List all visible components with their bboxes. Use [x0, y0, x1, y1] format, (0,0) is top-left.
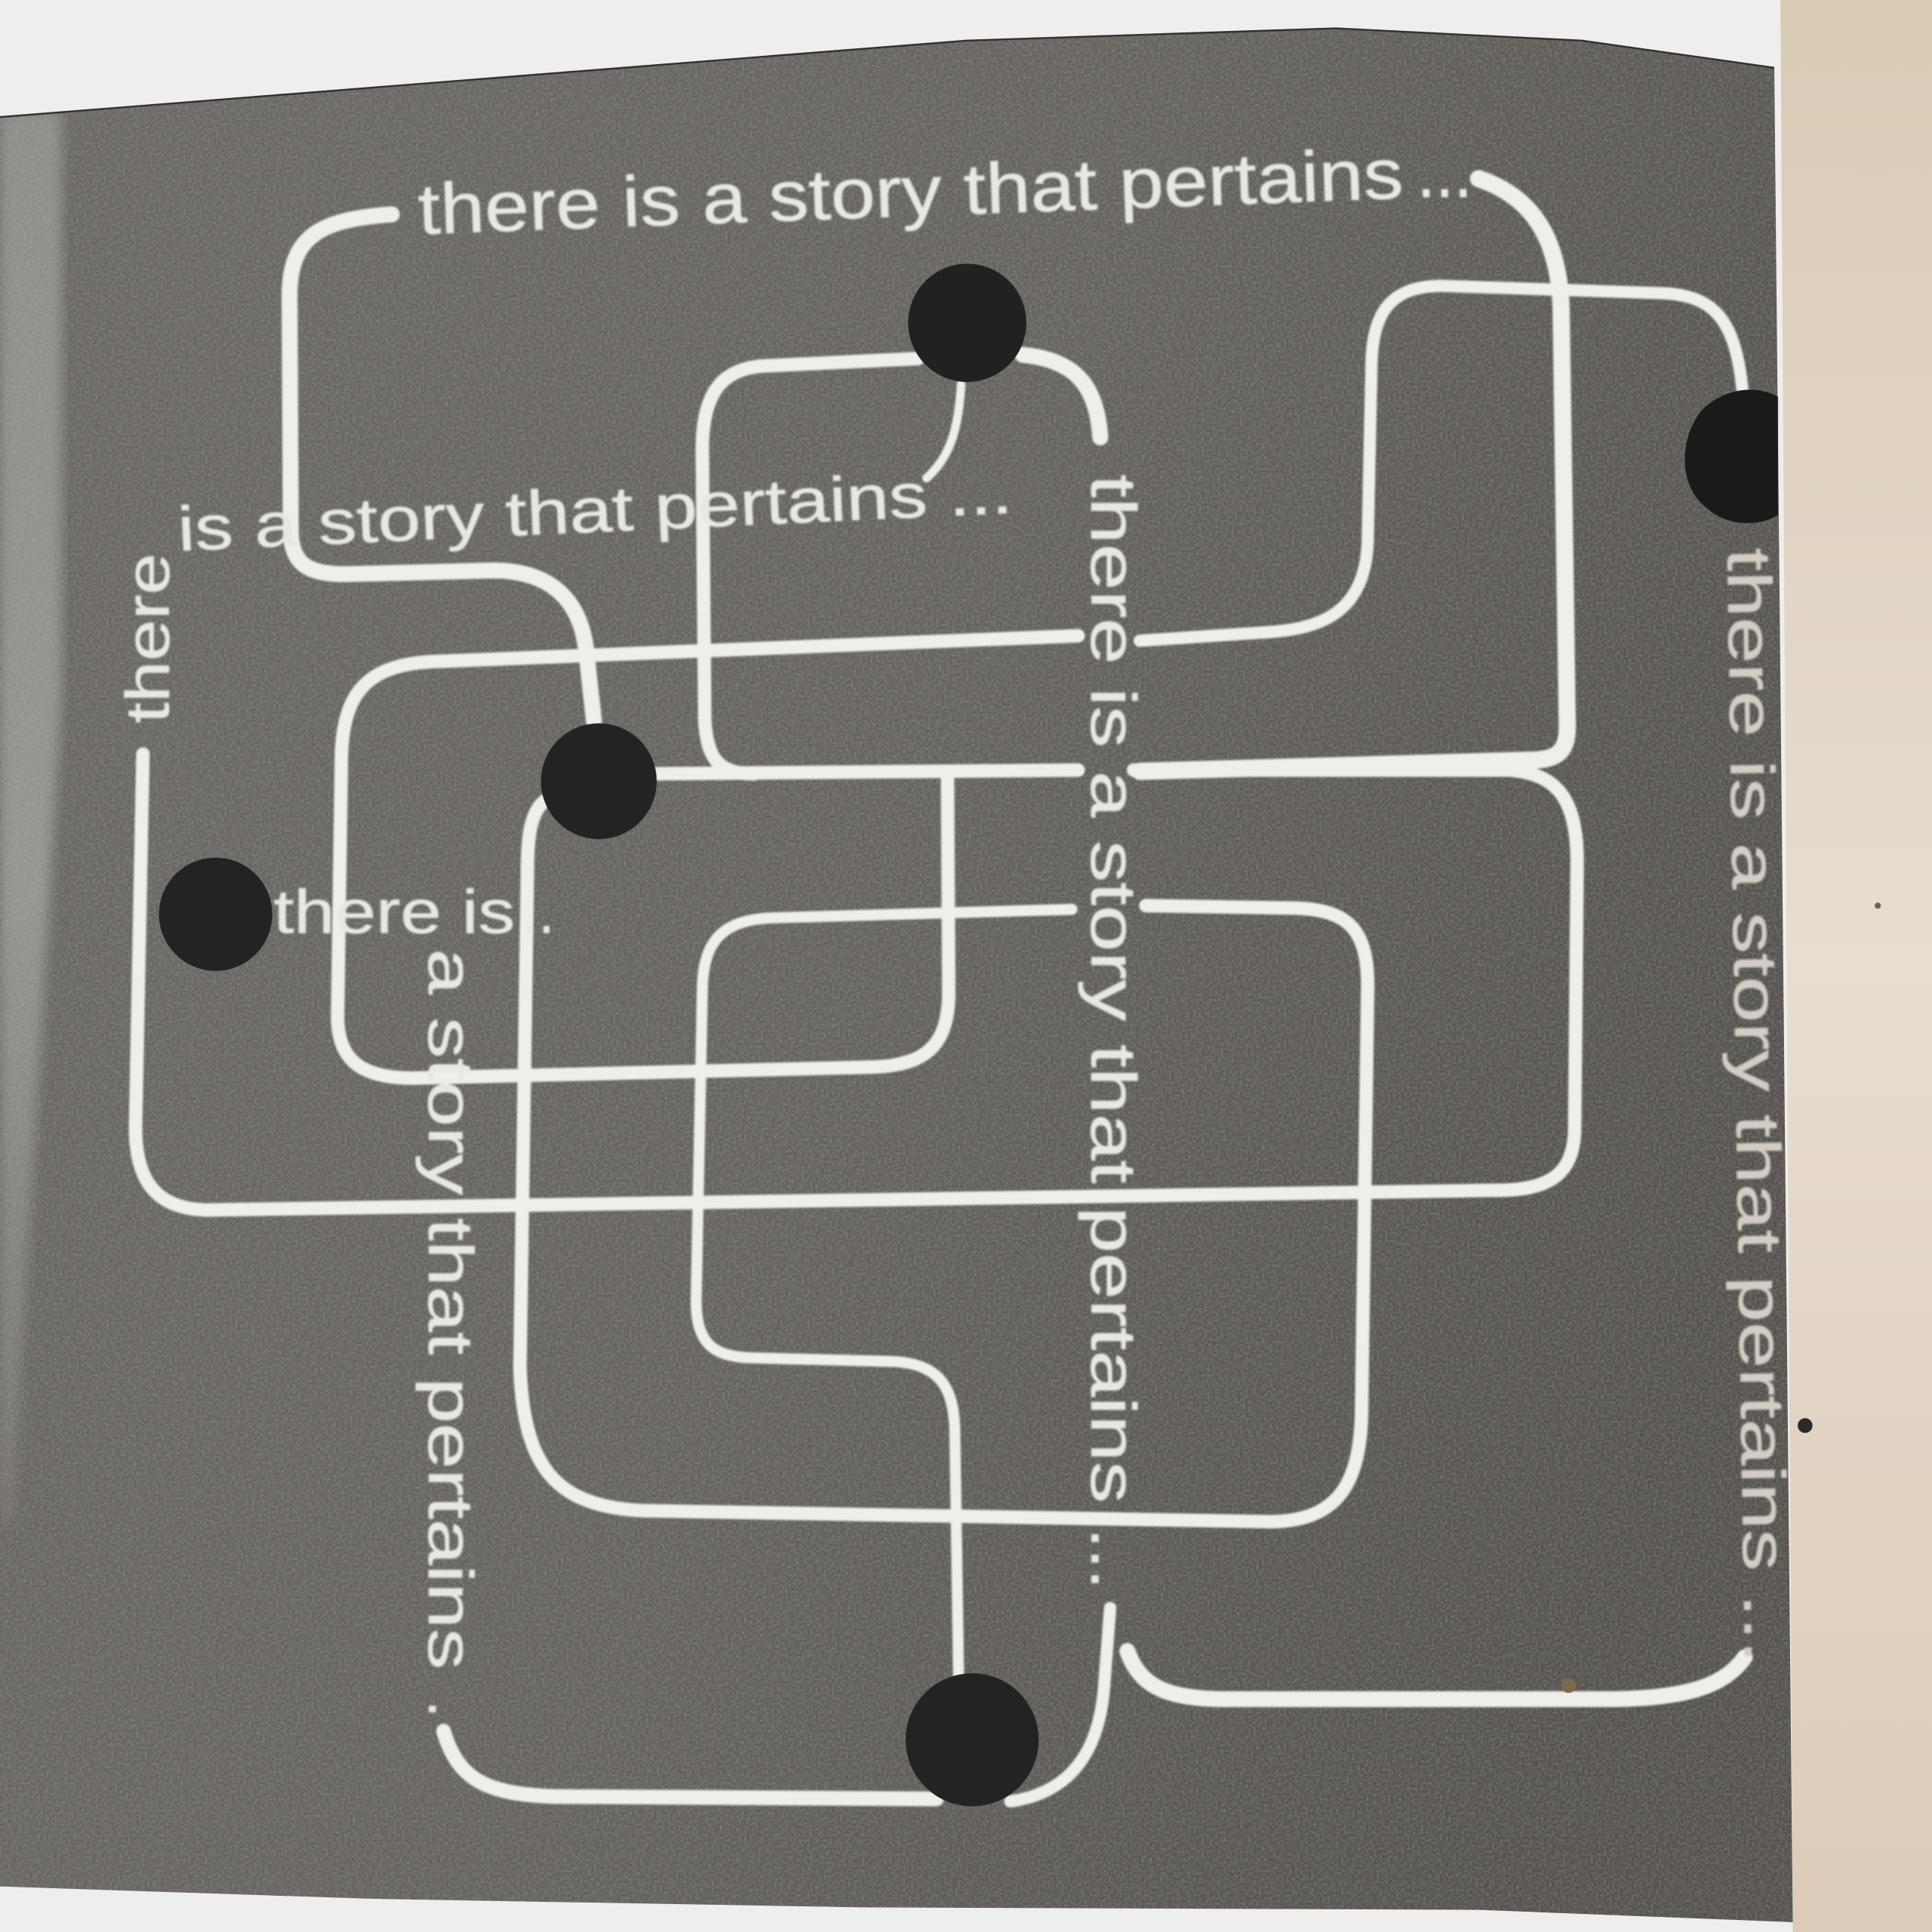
- label: there is ellipsis: ..: [522, 878, 555, 946]
- line: central dot bottom loop: [520, 801, 1367, 1521]
- story lines and labels: [114, 133, 1800, 1801]
- label: top text: there is a story that pertains: [417, 134, 1404, 250]
- dot: top centre: [908, 263, 1026, 382]
- line: from top label to central dot: [290, 214, 594, 721]
- speck: black mark on cream: [1798, 1418, 1813, 1433]
- line: bottom left bracket: [444, 1731, 937, 1799]
- line: upper dot short tail: [927, 384, 961, 478]
- line: left long loop: [337, 635, 1078, 1078]
- label: top text ellipsis: ...: [1417, 133, 1472, 213]
- dot: right edge: [1684, 389, 1778, 523]
- line: upper dot right hook: [1023, 355, 1100, 438]
- panel top edge: [0, 29, 1774, 117]
- speck: small mark on cream: [1875, 903, 1881, 909]
- label: centre text ellipsis: ...: [1078, 1527, 1150, 1589]
- line: lower right bracket: [1128, 1651, 1745, 1699]
- label: vertical text ellipsis: .: [415, 1700, 485, 1718]
- label: there rotated up: there: [114, 553, 183, 723]
- label: centre vertical text: there is a story that pertains: [1078, 475, 1150, 1503]
- line: right dot through upper loop: [1140, 286, 1743, 641]
- speck: brown mark on bracket: [1561, 1678, 1576, 1693]
- line: horizontal from central dot: [653, 770, 1078, 774]
- label: right vertical text: there is a story that pertains ...: [1714, 547, 1800, 1663]
- dot: left: [159, 857, 272, 971]
- dot: central: [541, 723, 657, 839]
- line: from top label end down to the long horizontal: [1140, 179, 1567, 771]
- dot: bottom: [906, 1673, 1038, 1806]
- label: a story that pertains, vertical: a story that pertains: [415, 949, 485, 1669]
- line: big outer loop to there: [136, 754, 1577, 1210]
- label: there is: there is: [273, 878, 515, 946]
- label: second horizontal text: is a story that pertains ...: [176, 457, 1014, 565]
- line: bottom right up-stroke: [1011, 1608, 1110, 1801]
- background: cream surface on the right: [1780, 0, 1932, 1932]
- line: upper dot left branch: [703, 358, 918, 774]
- line: inner S curve to bottom dot: [696, 909, 1072, 1678]
